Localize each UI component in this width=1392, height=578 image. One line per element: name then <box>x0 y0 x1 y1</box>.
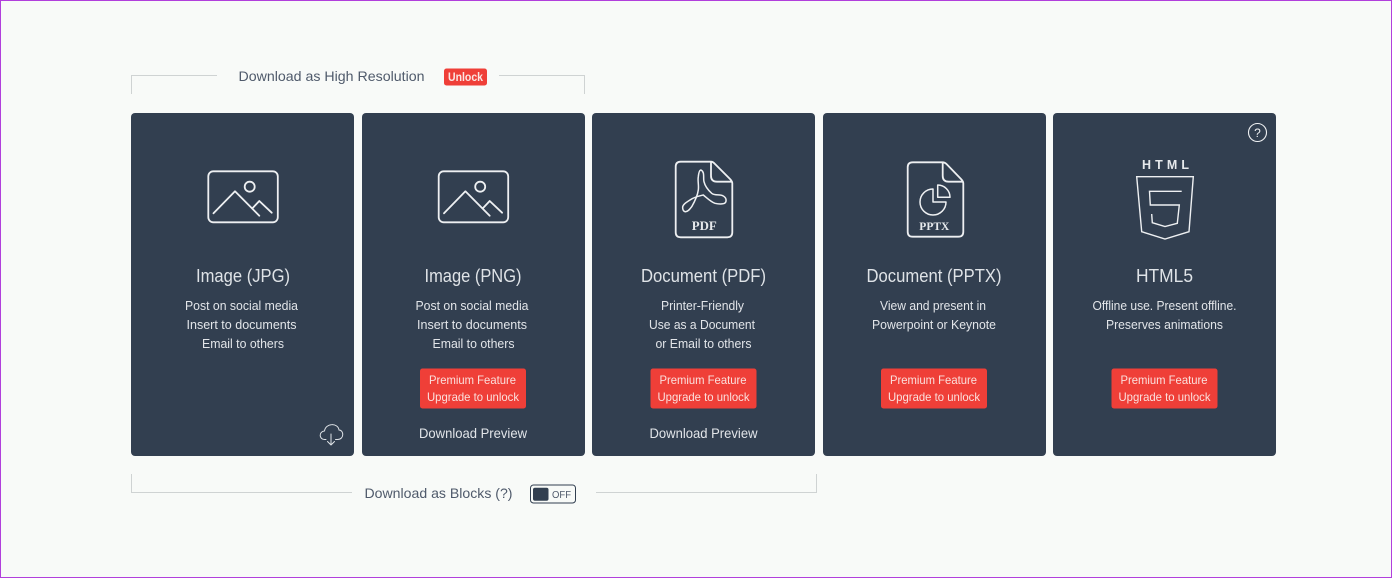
section header: Download as High Resolution <box>132 68 584 94</box>
description: Insert to documents <box>417 318 527 332</box>
toggle: off: OFF <box>552 490 571 501</box>
heading: high resolution: Download as High Resolution <box>238 68 424 84</box>
description: View and present in <box>880 299 986 313</box>
icon: image <box>439 171 508 222</box>
label: PDF: PDF <box>692 218 717 233</box>
description: Post on social media <box>185 299 298 313</box>
description: Insert to documents <box>186 318 296 332</box>
description <box>872 299 996 332</box>
badge: premium feature <box>1112 368 1218 408</box>
description: Preserves animations <box>1106 318 1223 332</box>
badge: premium feature: Premium Feature <box>1120 373 1208 387</box>
section footer: Download as Blocks <box>132 474 816 503</box>
badge: premium feature: Upgrade to unlock <box>1118 390 1211 404</box>
description <box>185 299 298 351</box>
badge: premium feature: Upgrade to unlock <box>427 390 520 404</box>
icon: PDF file <box>676 162 732 237</box>
badge: premium feature: Upgrade to unlock <box>888 390 981 404</box>
title: Document (PPTX): Document (PPTX) <box>866 266 1002 286</box>
description: Email to others <box>432 337 514 351</box>
badge: premium feature: Premium Feature <box>890 373 977 387</box>
heading: blocks: Download as Blocks (?) <box>364 485 512 501</box>
link: download preview: Download Preview <box>650 425 758 441</box>
label: PPTX: PPTX <box>919 219 950 233</box>
title: HTML5: HTML5 <box>1136 266 1193 286</box>
title: Document (PDF): Document (PDF) <box>641 266 766 286</box>
link: download preview: Download Preview <box>419 425 528 441</box>
badge: premium feature <box>881 368 987 408</box>
icon: HTML5 shield <box>1137 158 1193 239</box>
icon: help: ? <box>1254 126 1261 140</box>
badge: premium feature: Premium Feature <box>660 373 747 387</box>
icon: cloud download <box>320 425 343 445</box>
badge: unlock: Unlock <box>448 70 483 84</box>
description: Use as a Document <box>649 318 755 332</box>
description: Offline use. Present offline. <box>1092 299 1236 313</box>
description: or Email to others <box>656 337 752 351</box>
description: Printer-Friendly <box>661 299 745 313</box>
icon: image <box>208 171 278 222</box>
description <box>416 299 529 351</box>
icon: help <box>1248 124 1266 142</box>
description: Powerpoint or Keynote <box>872 318 996 332</box>
title: Image (JPG): Image (JPG) <box>196 266 290 286</box>
panel: Document (PDF) <box>592 113 815 456</box>
panel: HTML5 <box>1053 113 1276 456</box>
icon: HTML5 shield: HTML <box>1142 158 1189 172</box>
badge: premium feature: Upgrade to unlock <box>658 390 750 404</box>
description: Email to others <box>202 337 284 351</box>
title: Image (PNG): Image (PNG) <box>424 266 522 286</box>
description <box>649 299 755 351</box>
panel: Image (PNG) <box>362 113 585 456</box>
panel: Document (PPTX) <box>823 113 1046 456</box>
badge: premium feature: Premium Feature <box>429 373 516 387</box>
description: Post on social media <box>416 299 529 313</box>
panel: Image (JPG) <box>131 113 354 456</box>
description <box>1092 299 1236 332</box>
icon: PPTX file <box>908 162 963 237</box>
toggle: off <box>530 485 576 503</box>
badge: premium feature <box>650 368 756 408</box>
badge: premium feature <box>420 368 526 408</box>
